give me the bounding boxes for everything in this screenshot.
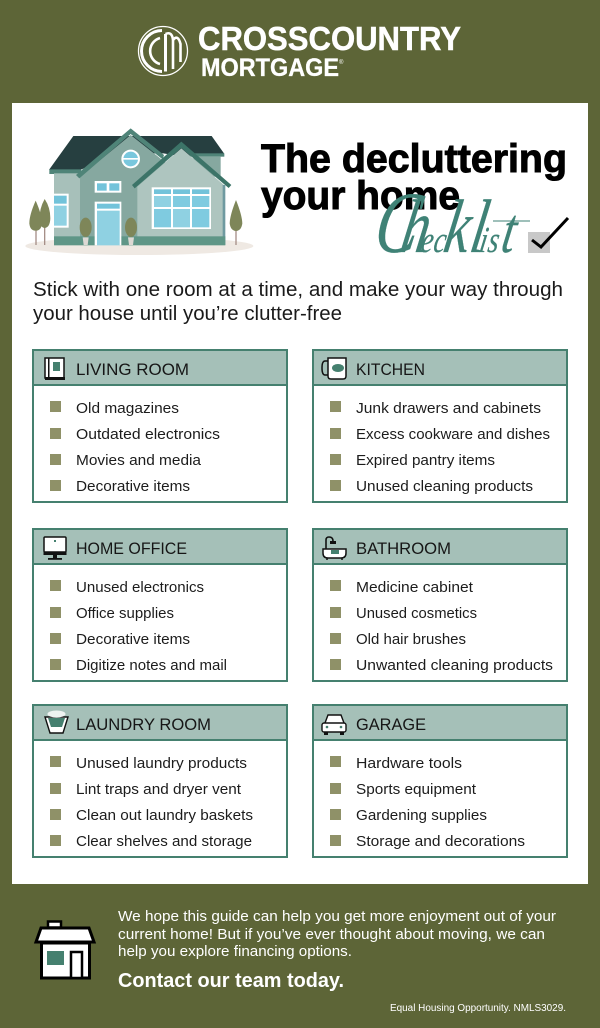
panel: garage: Sports equipment bbox=[356, 781, 477, 798]
round window bbox=[121, 150, 140, 168]
panel: home office: HOME OFFICE bbox=[76, 539, 187, 558]
rear roof bbox=[49, 136, 224, 170]
panel: home office bbox=[33, 529, 287, 681]
footer message bbox=[118, 908, 556, 960]
logo wordmark: CROSSCOUNTRY bbox=[198, 20, 461, 57]
footer message: help you explore financing options. bbox=[118, 943, 352, 960]
panel: kitchen: Expired pantry items bbox=[356, 452, 495, 469]
panel: bathroom: Unwanted cleaning products bbox=[356, 657, 553, 674]
script word: Checklist: s bbox=[485, 220, 503, 261]
panel: garage bbox=[313, 705, 567, 857]
panel: laundry room: Lint traps and dryer vent bbox=[76, 781, 242, 798]
intro text: Stick with one room at a time, and make your way through bbox=[33, 279, 563, 301]
icon: car bbox=[322, 715, 346, 735]
script word: Checklist: i bbox=[477, 220, 491, 261]
trees bbox=[29, 199, 242, 245]
panel: living room bbox=[33, 350, 287, 502]
script word: Checklist: k bbox=[439, 184, 479, 269]
icon: mug bbox=[322, 358, 346, 379]
left window bbox=[53, 194, 69, 228]
icon: laundry basket bbox=[45, 710, 68, 733]
panel: home office: Decorative items bbox=[76, 631, 190, 648]
icon: book bbox=[45, 358, 65, 380]
footer message: We hope this guide can help you get more enjoyment out of your bbox=[118, 908, 556, 925]
panel: laundry room: Clean out laundry baskets bbox=[76, 807, 253, 824]
panel: living room: Movies and media bbox=[76, 452, 202, 469]
script word: Checklist bbox=[369, 174, 530, 271]
gable centre bbox=[80, 135, 167, 245]
panel: kitchen: Junk drawers and cabinets bbox=[356, 400, 541, 417]
title: your home bbox=[261, 174, 460, 218]
intro text bbox=[33, 279, 563, 325]
panel: bathroom: Unused cosmetics bbox=[356, 605, 477, 622]
panel: kitchen: KITCHEN bbox=[356, 360, 425, 379]
panel: laundry room bbox=[33, 705, 287, 857]
panel: bathroom: BATHROOM bbox=[356, 539, 451, 558]
panel: laundry room: Unused laundry products bbox=[76, 755, 247, 772]
intro text: your house until you’re clutter-free bbox=[33, 303, 342, 325]
logo: CrossCountry Mortgage bbox=[138, 20, 461, 82]
icon: computer monitor bbox=[44, 537, 66, 560]
panel: laundry room: LAUNDRY ROOM bbox=[76, 715, 211, 734]
base bbox=[54, 236, 225, 245]
icon: bathtub bbox=[323, 537, 346, 560]
logo: CrossCountry Mortgage: ® bbox=[339, 59, 344, 66]
door bbox=[95, 202, 121, 245]
panel: garage: Hardware tools bbox=[356, 755, 462, 772]
script word: Checklist: c bbox=[431, 220, 450, 261]
logo: CrossCountry Mortgage: MORTGAGE bbox=[201, 54, 339, 82]
script word: Checklist: t bbox=[497, 196, 524, 267]
panel: bathroom: Old hair brushes bbox=[356, 631, 466, 648]
icon: footer house bbox=[36, 922, 94, 978]
script word: Checklist: e bbox=[418, 220, 437, 261]
panel: garage: Gardening supplies bbox=[356, 807, 487, 824]
panel: living room: LIVING ROOM bbox=[76, 360, 189, 379]
panel: home office: Digitize notes and mail bbox=[76, 657, 227, 674]
panel: kitchen: Unused cleaning products bbox=[356, 478, 533, 495]
panel: laundry room: Clear shelves and storage bbox=[76, 833, 252, 850]
script word: Checklist: C bbox=[369, 174, 430, 271]
footer message: current home! But if you’ve ever thought about moving, we can bbox=[118, 926, 545, 943]
panel: garage: Storage and decorations bbox=[356, 833, 525, 850]
gable right bbox=[137, 148, 224, 245]
icon: checked box bbox=[528, 218, 568, 253]
call to action: Contact our team today. bbox=[118, 970, 344, 992]
panel: living room: Outdated electronics bbox=[76, 426, 220, 443]
panel: kitchen: Excess cookware and dishes bbox=[356, 426, 550, 443]
title: The decluttering bbox=[261, 137, 567, 181]
title bbox=[261, 137, 567, 271]
panel: home office: Unused electronics bbox=[76, 579, 204, 596]
panel: living room: Decorative items bbox=[76, 478, 190, 495]
legal note: Equal Housing Opportunity. NMLS3029. bbox=[390, 1003, 566, 1014]
upper window bbox=[95, 181, 121, 193]
script word: Checklist: h bbox=[395, 184, 438, 269]
panel: bathroom: Medicine cabinet bbox=[356, 579, 474, 596]
large window bbox=[152, 187, 211, 229]
illustration: house bbox=[25, 128, 253, 255]
icon: logo emblem bbox=[138, 26, 188, 76]
panel: home office: Office supplies bbox=[76, 605, 174, 622]
panel: living room: Old magazines bbox=[76, 400, 179, 417]
panel: kitchen bbox=[313, 350, 567, 502]
panel: bathroom bbox=[313, 529, 567, 681]
panel: garage: GARAGE bbox=[356, 715, 426, 734]
script word: Checklist: l bbox=[465, 184, 496, 269]
